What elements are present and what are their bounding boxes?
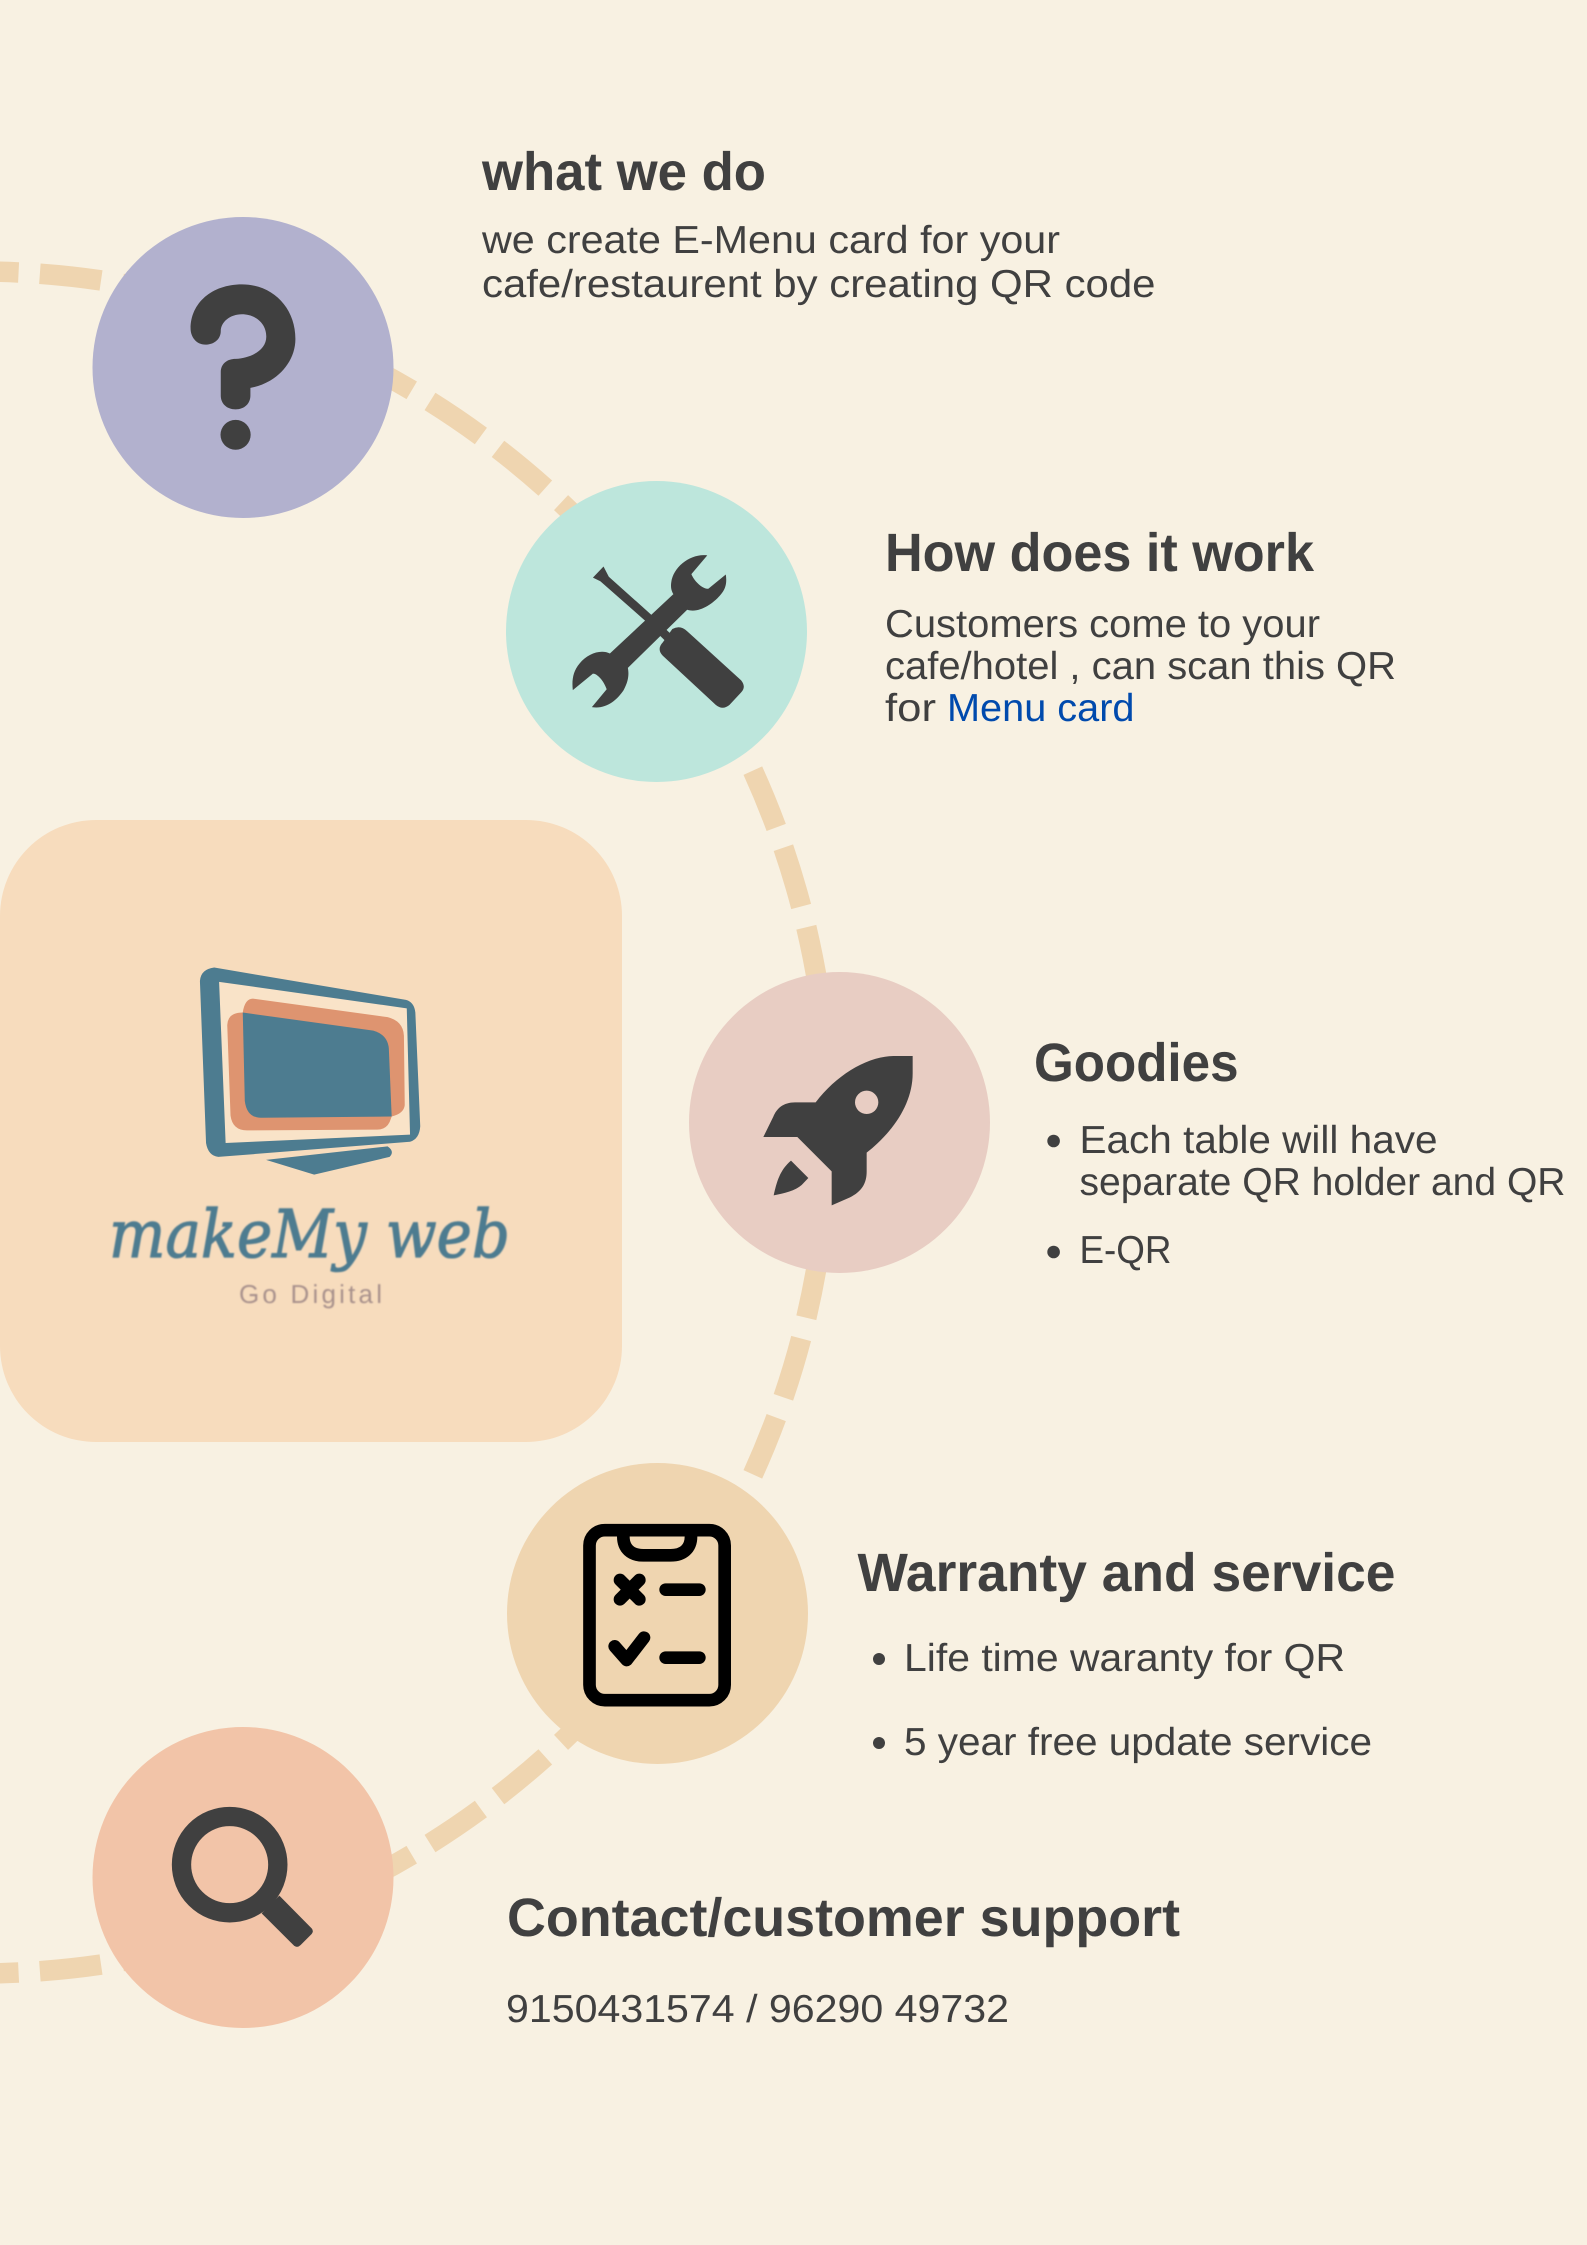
logo wordmark: makeMy web [109, 1196, 510, 1273]
phone numbers: 9150431574 / 96290 49732 [506, 1988, 1009, 2031]
heading: warranty and service: Warranty and service [858, 1543, 1396, 1603]
step 3: rocket icon circle [689, 972, 990, 1273]
heading: contact/customer support: Contact/customer support [507, 1888, 1180, 1948]
description: cafe/hotel , can scan this QR [885, 645, 1396, 688]
description: we create E-Menu card for your [481, 219, 1060, 262]
bullet list: E-QR [1080, 1229, 1172, 1272]
description: cafe/restaurent by creating QR code [482, 263, 1156, 306]
description [885, 603, 1396, 730]
icon: question mark [191, 284, 295, 450]
icon: rocket [763, 1056, 913, 1205]
icon: clipboard checklist [589, 1530, 725, 1700]
step 4 text [858, 1543, 1396, 1764]
step 4: checklist icon circle [507, 1463, 808, 1764]
step 5 text [506, 1888, 1180, 2031]
step 1 text [481, 142, 1156, 306]
bullet list: Life time waranty for QR [904, 1637, 1345, 1680]
bullet list: 5 year free update service [904, 1721, 1372, 1764]
step 3 text [1034, 1033, 1566, 1272]
heading: what we do: what we do [481, 142, 766, 202]
logo icon: monitor [200, 968, 420, 1175]
step 1: question icon circle [92, 217, 394, 518]
description: for [885, 687, 936, 730]
step 2: tools icon circle [506, 481, 807, 782]
dashed connector arc [0, 272, 829, 1974]
bullet list: Each table will have [1080, 1119, 1438, 1162]
description: Menu card [947, 687, 1134, 730]
heading: goodies: Goodies [1034, 1033, 1238, 1093]
bullet list [1047, 1119, 1566, 1272]
bullet list [873, 1637, 1372, 1764]
panel: logo card [0, 820, 622, 1442]
description [481, 219, 1156, 306]
heading: how does it work: How does it work [885, 523, 1315, 583]
icon: magnifying glass [181, 1816, 313, 1947]
step 2 text [885, 523, 1396, 730]
logo tagline: Go Digital [239, 1279, 382, 1309]
description: Customers come to your [885, 603, 1320, 646]
icon: crossed wrench and screwdriver [572, 555, 744, 708]
bullet list: separate QR holder and QR [1080, 1161, 1566, 1204]
step 5: search icon circle [92, 1727, 394, 2028]
